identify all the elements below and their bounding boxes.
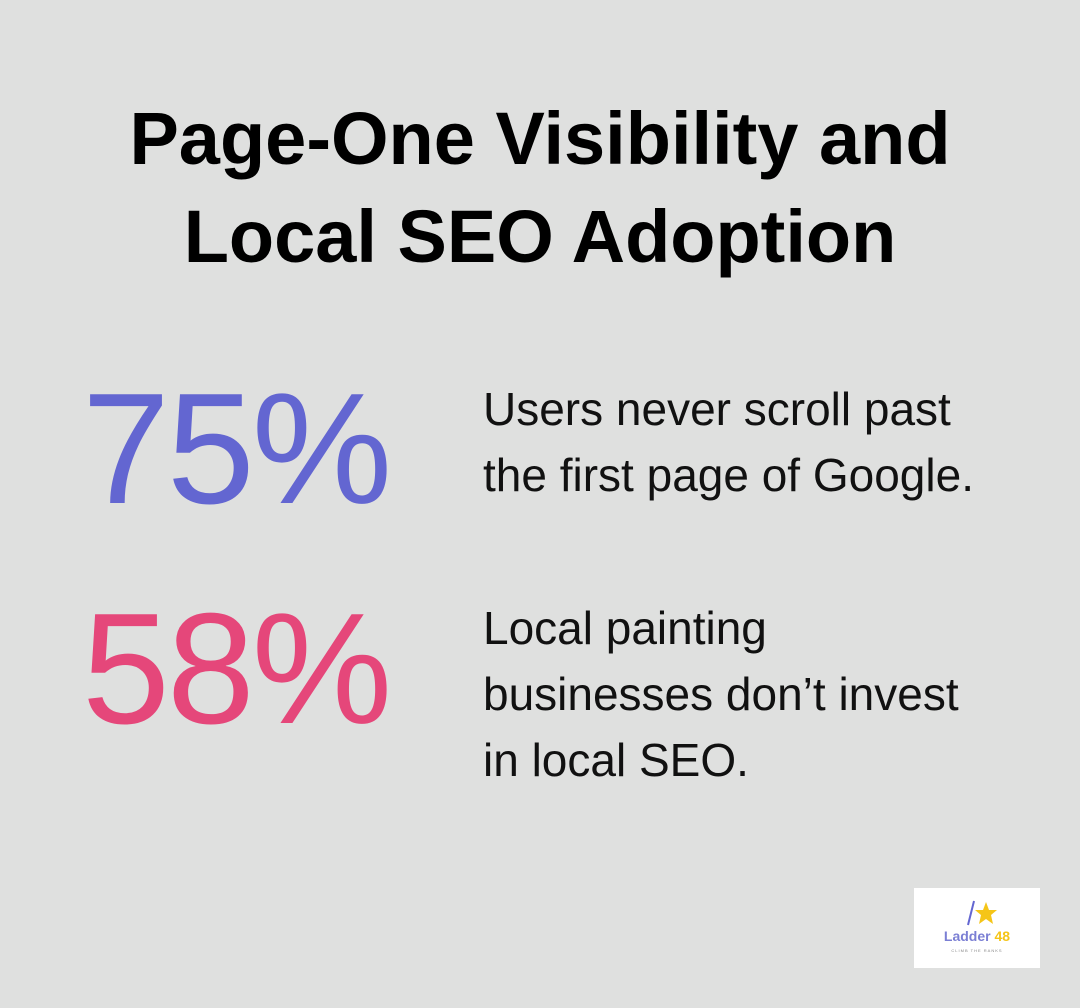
logo text: Ladder 48 (944, 928, 1010, 944)
text: 58% description (483, 602, 959, 786)
stat: 58%: 58% (82, 581, 389, 757)
text: 75% description: Users never scroll past (483, 383, 951, 435)
stat: 75%: 75% (82, 361, 389, 537)
text: 75% description (483, 383, 974, 501)
text: 58% description: businesses don’t invest (483, 668, 959, 720)
title: Page-One Visibility and (129, 97, 951, 180)
text: 58% description: in local SEO. (483, 734, 749, 786)
text: 58% description: Local painting (483, 602, 767, 654)
logo: Ladder 48: CLIMB THE RANKS (951, 948, 1003, 953)
text: 75% description: the first page of Google. (483, 449, 974, 501)
title: Local SEO Adoption (184, 195, 896, 278)
icon: ladder star (967, 900, 997, 926)
title (129, 97, 951, 278)
logo: Ladder 48 (914, 888, 1040, 968)
